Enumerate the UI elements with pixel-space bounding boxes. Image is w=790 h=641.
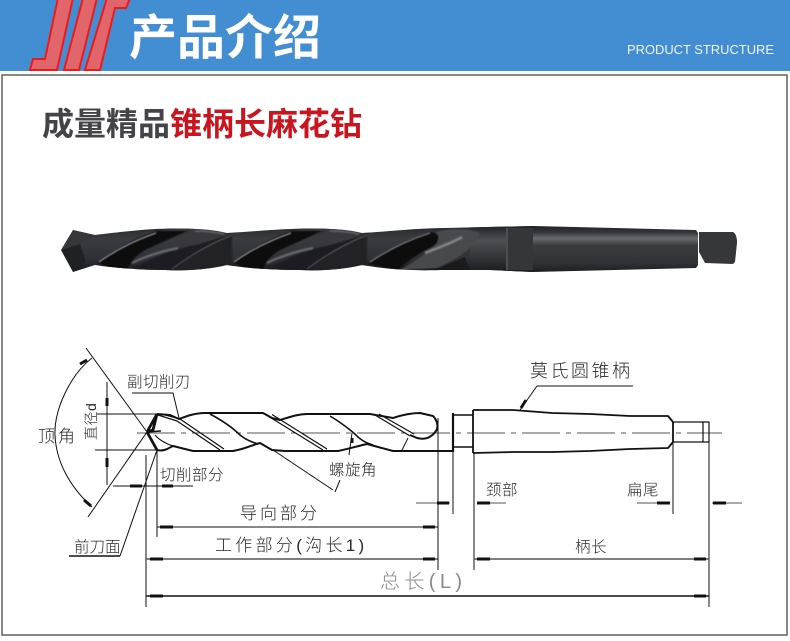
drill outline [147, 410, 709, 453]
label: cutting part: 切削部分 [160, 466, 224, 484]
icon: red stripes logo [30, 0, 130, 70]
flattened tang [699, 232, 737, 264]
product photo: taper shank drill [61, 226, 737, 272]
label: secondary cutting edge: 副切削刃 [127, 373, 191, 391]
taper shank [533, 226, 698, 272]
label: neck: 颈部 [486, 481, 518, 499]
label: tang: 扁尾 [627, 481, 659, 499]
label: overall length: 总长(L) [380, 570, 466, 593]
drill marking band [506, 228, 533, 270]
header banner [0, 0, 790, 71]
last flute run-out [368, 232, 445, 270]
label: rake face: 前刀面 [74, 538, 121, 556]
banner title: 产品介绍 [129, 12, 321, 65]
label: shank length: 柄长 [575, 538, 607, 556]
dimension arrows [80, 360, 726, 596]
label: apex angle: 顶角 [38, 427, 78, 446]
label: guide part: 导向部分 [240, 504, 320, 523]
technical diagram [55, 348, 742, 607]
label: morse taper shank: 莫氏圆锥柄 [530, 361, 632, 381]
dimension and extension lines [55, 348, 742, 607]
drill fluted body [61, 226, 533, 272]
label: diameter d: 直径d [83, 403, 99, 440]
banner subtitle: PRODUCT STRUCTURE [627, 42, 774, 57]
heading: 成量精品锥柄长麻花钻 [42, 106, 362, 142]
label: helix angle: 螺旋角 [329, 461, 377, 479]
center line [137, 432, 722, 434]
diagram labels [38, 361, 659, 593]
label: working part: 工作部分(沟长1) [215, 536, 367, 555]
